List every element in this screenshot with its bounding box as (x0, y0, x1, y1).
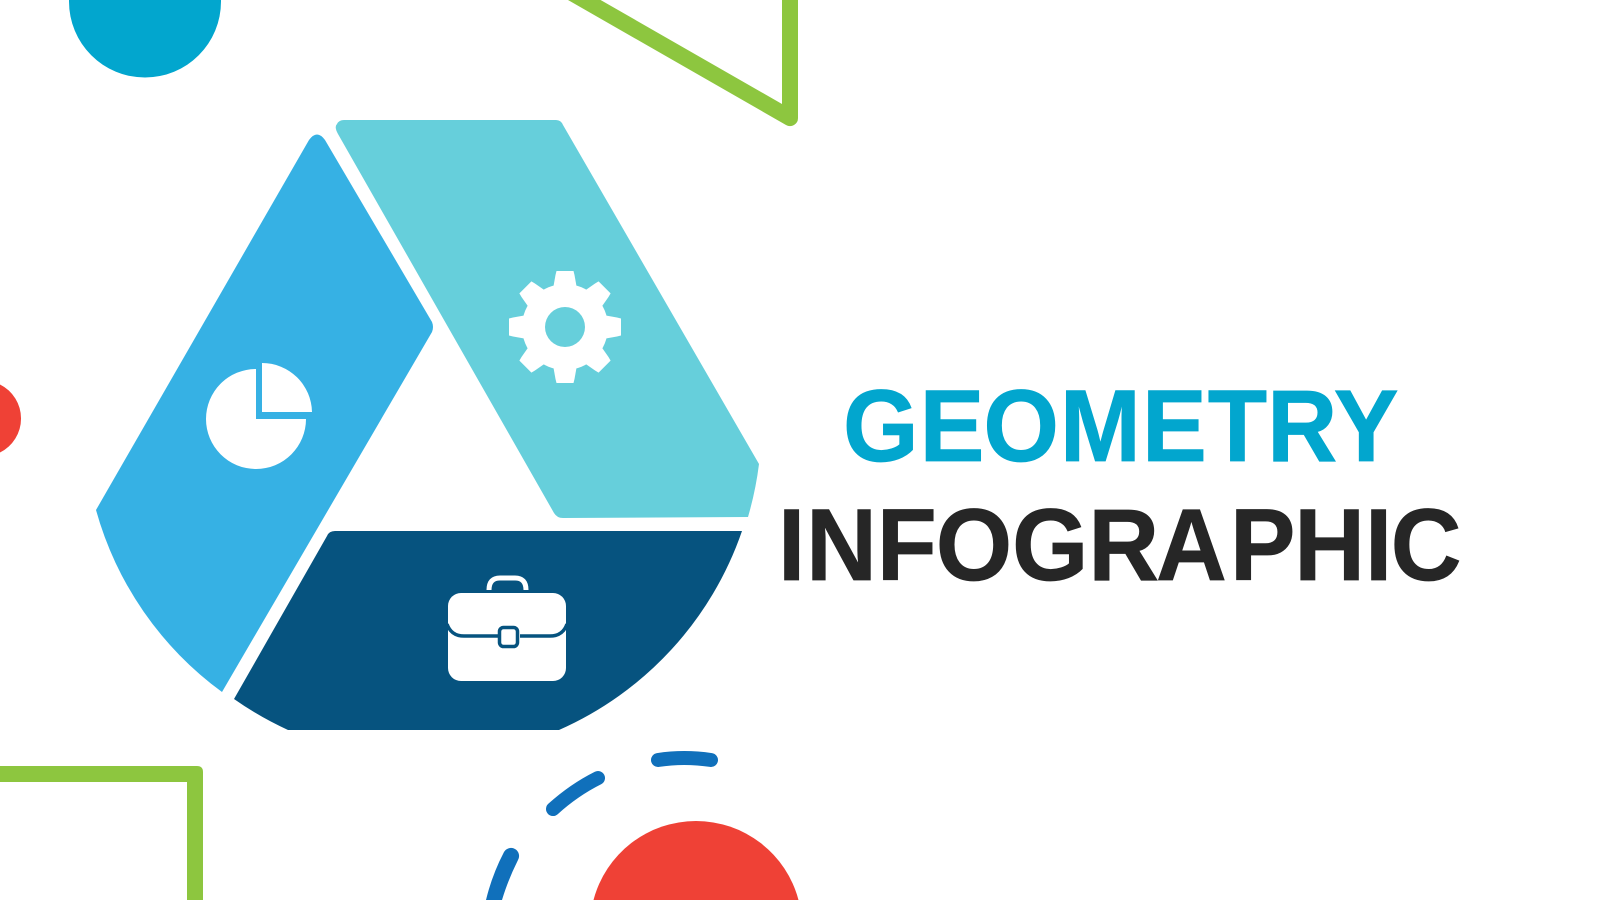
icon: gear (509, 271, 621, 383)
heading: INFOGRAPHIC: INFOGRAPHIC (778, 488, 1462, 602)
heading: GEOMETRY: GEOMETRY (843, 370, 1399, 484)
decorative circle: left red (0, 384, 21, 452)
decorative semicircle: bottom red (594, 821, 798, 900)
decorative dashed arc: blue (486, 758, 711, 900)
icon: briefcase (447, 578, 567, 681)
icon: pie chart (206, 363, 312, 469)
panel: gear segment, light teal (336, 120, 759, 518)
decorative square outline: bottom-left green (0, 766, 203, 900)
panel: pie chart segment, sky blue (96, 134, 433, 692)
panel: briefcase segment, dark navy (234, 531, 742, 730)
decorative circle: top cyan (69, 0, 221, 78)
decorative triangle outline: top green (568, 0, 798, 126)
